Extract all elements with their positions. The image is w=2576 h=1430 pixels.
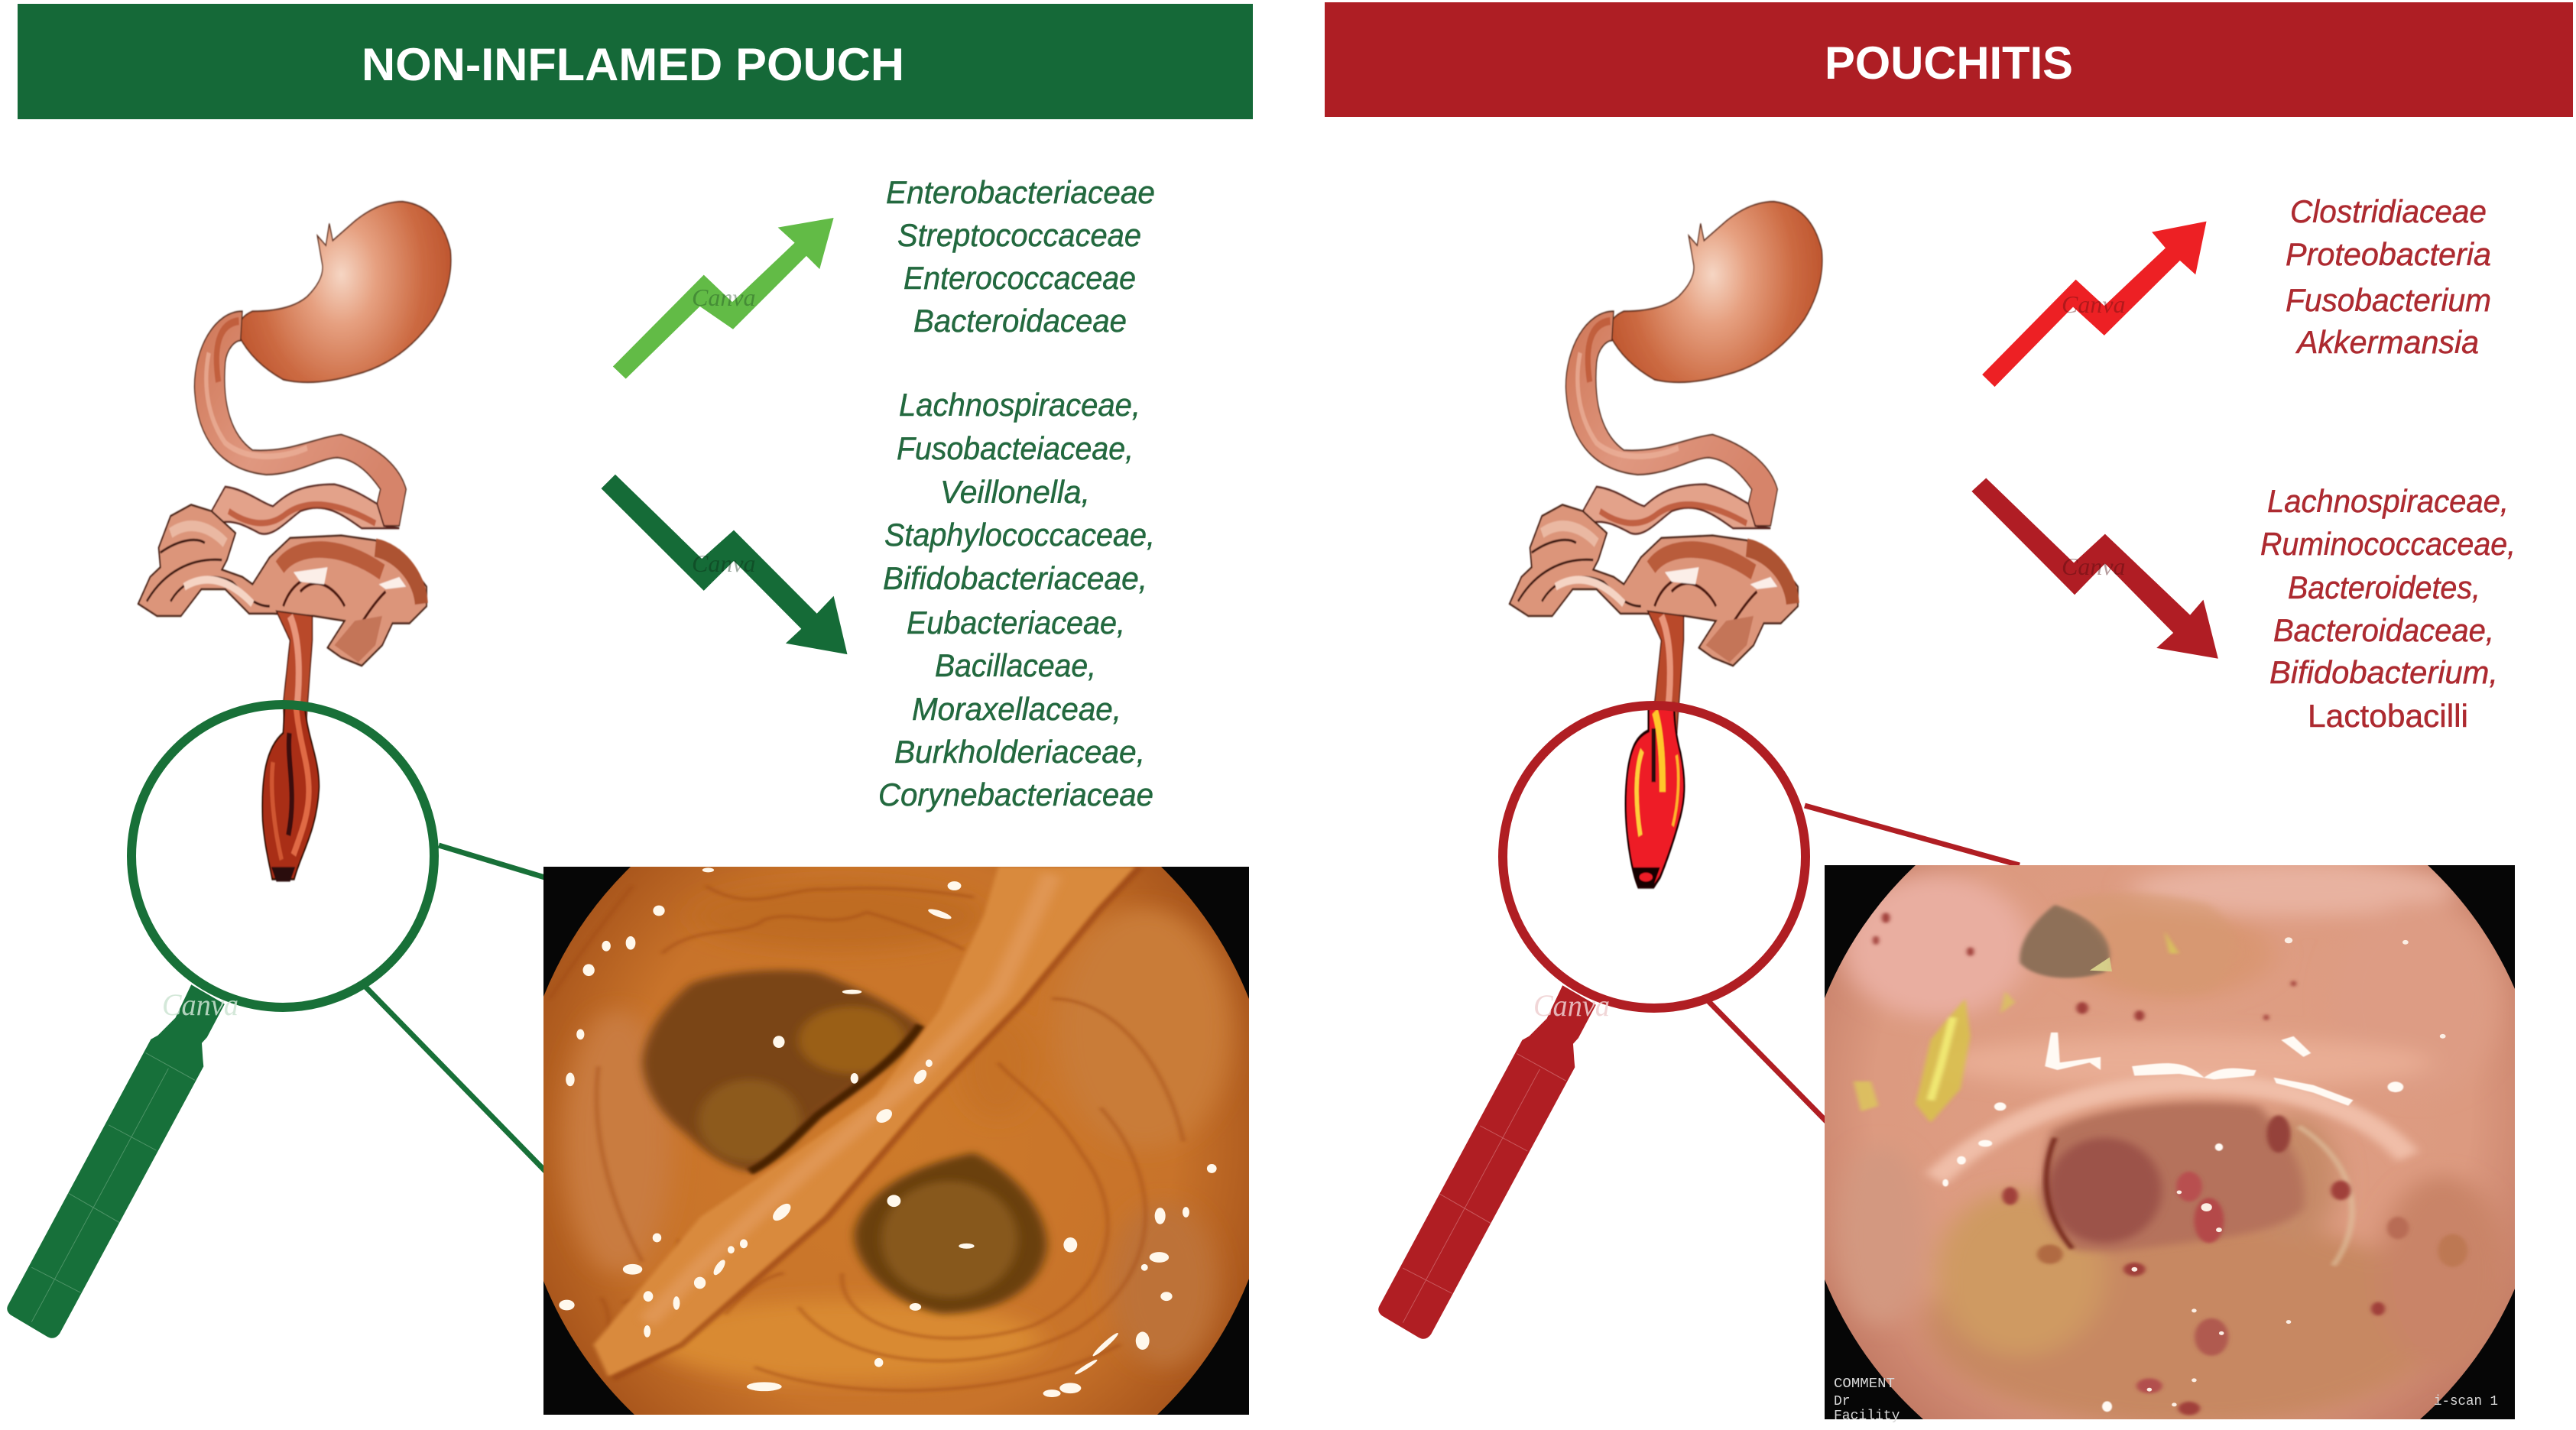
lower lumen: [855, 1153, 1047, 1314]
specular highlights: [1942, 1033, 2403, 1412]
increased taxa list: Bacteroidaceae: [913, 303, 1127, 339]
decreased taxa list: Staphylococcaceae,: [884, 517, 1155, 553]
mucosal fold band: [594, 867, 1140, 1378]
decreased taxa list: Bacillaceae,: [935, 647, 1096, 683]
increased taxa list: [886, 174, 1155, 339]
decreased taxa list: Bacteroidetes,: [2288, 569, 2480, 605]
decreased taxa list: Eubacteriaceae,: [907, 605, 1125, 640]
decreased taxa list: Fusobacteiaceae,: [897, 430, 1134, 466]
specular highlights: [559, 867, 1217, 1397]
decreased taxa list: Ruminococcaceae,: [2260, 526, 2516, 562]
increased taxa list: Enterococcaceae: [904, 260, 1136, 296]
endoscopy image: pouchitis: [1825, 864, 2515, 1427]
increased taxa list: Proteobacteria: [2286, 236, 2491, 272]
icon: decrease arrow: [602, 475, 847, 654]
white mucosal flecks: [2131, 937, 2446, 1406]
magnifier lens: [1503, 705, 1805, 1008]
icon: increase arrow: Canva: [692, 284, 756, 311]
haemorrhagic spots: [1873, 913, 2467, 1415]
decreased taxa list: [878, 387, 1155, 812]
illustration: ileal pouch, non-inflamed: [262, 704, 319, 882]
decreased taxa list: [2260, 483, 2516, 734]
icon: increase arrow: [613, 218, 834, 379]
illustration: stomach and small intestine, pouchitis: [1510, 202, 1822, 733]
decreased taxa list: Corynebacteriaceae: [878, 777, 1153, 812]
scope overlay text: COMMENT: [1834, 1376, 1895, 1392]
decreased taxa list: Veillonella,: [940, 474, 1090, 510]
mucosal arch highlight: [1935, 1083, 2408, 1179]
increased taxa list: Fusobacterium: [2286, 282, 2491, 318]
scope overlay text: [1834, 1376, 2498, 1424]
lower lumen: [2040, 1102, 2352, 1266]
decreased taxa list: Lactobacilli: [2308, 698, 2468, 734]
heading bar: non-inflamed pouch: [18, 4, 1253, 119]
increased taxa list: Clostridiaceae: [2290, 193, 2487, 229]
decreased taxa list: Moraxellaceae,: [912, 691, 1121, 727]
mucosal tone patches: [1836, 864, 2507, 1427]
scope overlay text: Facility: [1834, 1409, 1900, 1424]
icon: decrease arrow: Canva: [692, 550, 756, 577]
magnifier handle: [1378, 985, 1596, 1339]
upper lumen: [642, 970, 920, 1172]
heading bar: pouchitis: [1325, 2, 2573, 117]
decreased taxa list: Bifidobacterium,: [2269, 654, 2498, 690]
increased taxa list: Akkermansia: [2295, 324, 2479, 360]
watermark on magnifier neck: Canva: [1533, 988, 1610, 1023]
decreased taxa list: Bacteroidaceae,: [2273, 612, 2494, 648]
illustration: stomach and small intestine: [138, 202, 451, 733]
endoscopy image: normal pouch: [543, 867, 1249, 1415]
magnifier handle: [7, 984, 225, 1338]
increased taxa list: [2286, 193, 2491, 360]
panel: non-inflamed pouch: [7, 4, 1253, 1415]
illustration: inflamed ileal pouch: [1626, 704, 1684, 887]
decreased taxa list: Lachnospiraceae,: [899, 387, 1140, 423]
scope overlay text: Dr: [1834, 1394, 1851, 1409]
decreased taxa list: Bifidobacteriaceae,: [883, 560, 1147, 596]
panel: pouchitis: [1325, 2, 2573, 1427]
icon: decrease arrow: [1971, 478, 2218, 659]
decreased taxa list: Burkholderiaceae,: [894, 734, 1145, 770]
connector lines to endoscopy image: [1708, 806, 2020, 1124]
heading bar: non-inflamed pouch: NON-INFLAMED POUCH: [362, 39, 904, 90]
fold contours: [550, 886, 1183, 1390]
upper lumen: [2017, 893, 2220, 980]
connector lines to endoscopy image: [365, 845, 547, 1173]
watermark on magnifier neck: Canva: [162, 987, 238, 1022]
decreased taxa list: Lachnospiraceae,: [2267, 483, 2509, 519]
magnifier lens: [131, 705, 434, 1007]
icon: increase arrow: [1982, 222, 2207, 387]
increased taxa list: Enterobacteriaceae: [886, 174, 1155, 210]
scope overlay text: i-scan 1: [2434, 1394, 2498, 1409]
yellow slough: [1854, 931, 2179, 1123]
icon: decrease arrow: Canva: [2062, 553, 2126, 580]
mucosal tone patches: [564, 882, 1232, 1382]
increased taxa list: Streptococcaceae: [897, 217, 1141, 253]
icon: increase arrow: Canva: [2062, 290, 2126, 318]
heading bar: pouchitis: POUCHITIS: [1825, 37, 2073, 89]
